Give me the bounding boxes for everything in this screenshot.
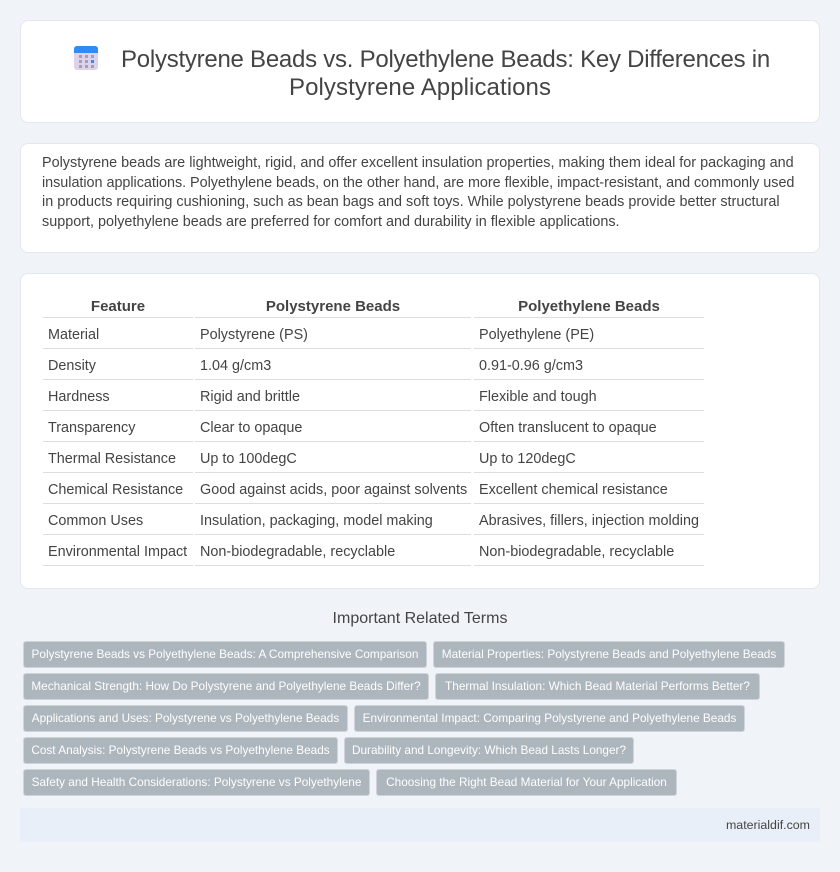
row: transparency: Clear to opaque [200,420,302,436]
row: thermal resistance: Up to 120degC [479,451,576,467]
heading: related terms: Important Related Terms [333,610,507,627]
tag: Safety and Health Considerations: Polystyrene vs Polyethylene [32,775,361,789]
row: material [43,327,704,349]
row: environmental impact: Non-biodegradable, recyclable [200,544,395,560]
tag: Polystyrene Beads vs Polyethylene Beads: A Comprehensive Comparison [32,647,418,661]
tag: Cost Analysis: Polystyrene Beads vs Polyethylene Beads [31,743,330,757]
table header [43,298,704,318]
panel: related term tags [23,641,785,796]
tag [354,705,745,732]
text block: introduction: Polystyrene beads are lightweight, rigid, and offer excellent insulation properties, making them ideal for packaging and [42,155,794,171]
title [121,46,770,101]
panel: introduction [20,143,820,253]
row: transparency [43,420,704,442]
tag [23,641,427,668]
row: hardness [43,389,704,411]
text block: introduction: insulation applications. Polyethylene beads, on the other hand, are more flexible, impact-resistant, and commonly used [42,175,794,191]
title: Polystyrene Beads vs. Polyethylene Beads: Key Differences in [121,46,770,73]
table header: Feature [91,298,145,315]
tag [23,737,338,764]
tag: Durability and Longevity: Which Bead Lasts Longer? [352,743,626,757]
text block: introduction: support, polyethylene beads are preferred for comfort and durability in flexible applications. [42,214,620,230]
row: common uses [43,513,704,535]
row: density: 1.04 g/cm3 [200,358,271,374]
table header: Polyethylene Beads [518,298,660,315]
title: Polystyrene Applications [289,74,551,101]
footer source text: materialdif.com [726,818,810,832]
row: density: 0.91-0.96 g/cm3 [479,358,583,374]
tag: Applications and Uses: Polystyrene vs Polyethylene Beads [32,711,339,725]
tag: Mechanical Strength: How Do Polystyrene and Polyethylene Beads Differ? [31,679,421,693]
row: chemical resistance: Chemical Resistance [48,482,183,498]
row: common uses: Common Uses [48,513,143,529]
tag [344,737,634,764]
panel: header [20,20,820,123]
text block: introduction [42,155,794,230]
row: hardness: Hardness [48,389,110,405]
row: chemical resistance: Excellent chemical resistance [479,482,668,498]
panel: comparison table [20,273,820,589]
tag [23,705,348,732]
tag [23,673,429,700]
icon: calendar grid [74,46,98,70]
tag: Choosing the Right Bead Material for Your Application [386,775,667,789]
row: chemical resistance [43,482,704,504]
row: thermal resistance [43,451,704,473]
row: material: Material [48,327,99,343]
row: material: Polystyrene (PS) [200,327,308,343]
row: density: Density [48,358,96,374]
tag: Thermal Insulation: Which Bead Material Performs Better? [445,679,750,693]
footer [20,808,820,842]
row: environmental impact [43,544,704,566]
row: transparency: Transparency [48,420,135,436]
tag: Environmental Impact: Comparing Polystyrene and Polyethylene Beads [363,711,736,725]
row: hardness: Flexible and tough [479,389,597,405]
row: environmental impact: Non-biodegradable, recyclable [479,544,674,560]
row: chemical resistance: Good against acids, poor against solvents [200,482,467,498]
row: hardness: Rigid and brittle [200,389,300,405]
tag [23,769,370,796]
tag [376,769,677,796]
tag [435,673,760,700]
row: thermal resistance: Thermal Resistance [48,451,176,467]
row: environmental impact: Environmental Impact [48,544,187,560]
tag: Material Properties: Polystyrene Beads and Polyethylene Beads [442,647,776,661]
row: density [43,358,704,380]
tag [433,641,785,668]
text block: introduction: in products requiring cushioning, such as bean bags and soft toys. While polystyrene beads provide better structural [42,194,780,210]
row: transparency: Often translucent to opaque [479,420,657,436]
row: common uses: Insulation, packaging, model making [200,513,433,529]
row: material: Polyethylene (PE) [479,327,594,343]
table header: Polystyrene Beads [266,298,400,315]
row: common uses: Abrasives, fillers, injection molding [479,513,699,529]
row: thermal resistance: Up to 100degC [200,451,297,467]
